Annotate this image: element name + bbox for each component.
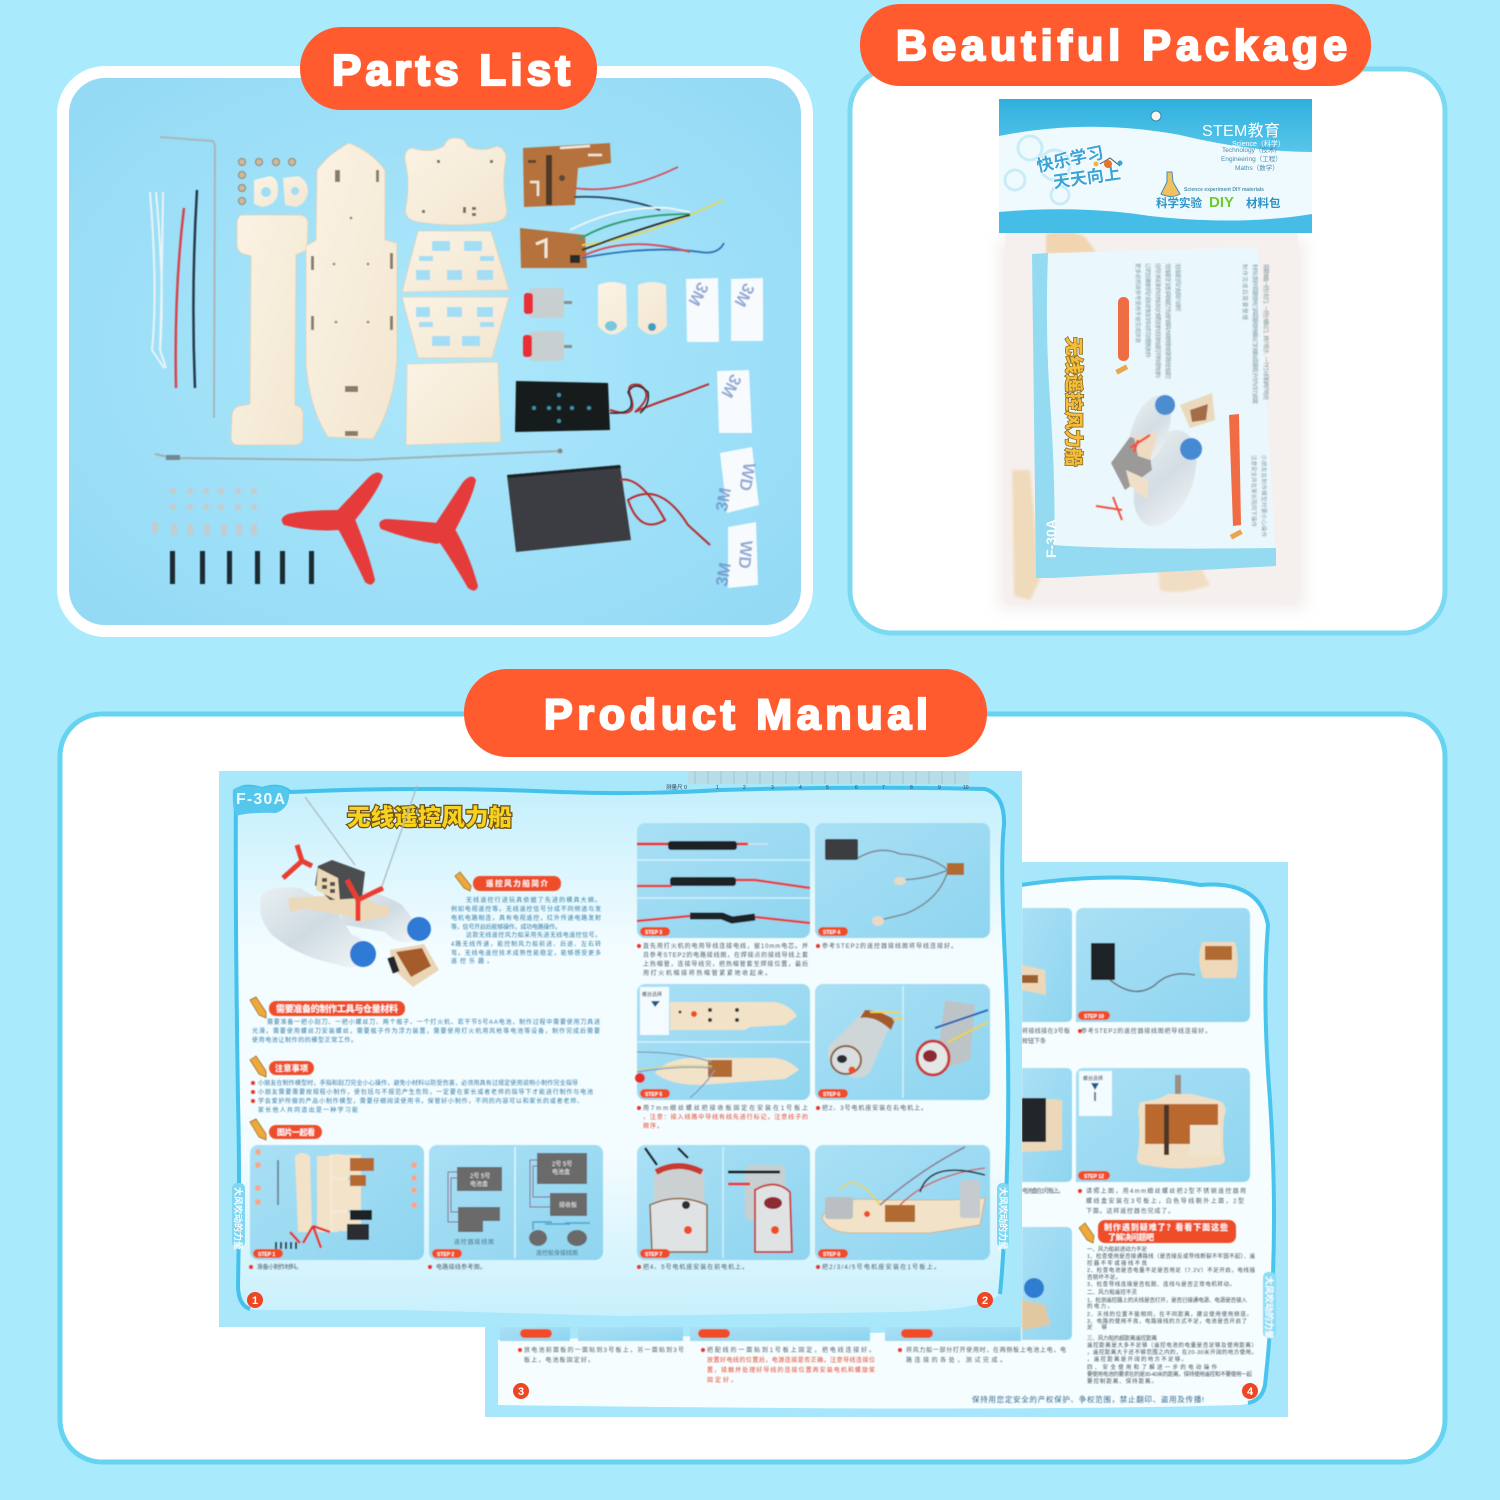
manual title: 无线遥控风力船 [347,804,512,830]
heading: parts list: Parts List [332,46,570,95]
troubleshooting text: 1、检查使用是否接通路线（是否接反或导线断裂不牢固不起）、遥 [1087,1252,1255,1260]
pill heading: 注意事项 [275,1063,308,1073]
card: screw plate [1076,1068,1250,1182]
rotated text columns: 小朋友在制作模型时要小心操作 [1260,455,1268,537]
troubleshooting pill: 制作遇到疑难了？看看下面这些 [1104,1222,1228,1232]
rotated text columns: 无线遥控风力船简介说明 [1174,263,1182,311]
part: receiver circuit board [520,228,587,268]
page number 3 [513,1383,529,1399]
step label [432,1249,462,1258]
part: red propeller right [379,476,478,591]
back captions: 请照上图，用4mm细丝螺丝把2型不锈钢遥控器用 [1086,1187,1246,1195]
ruler: 9 [938,785,941,791]
part: 3M tape strips: 3M [712,486,735,513]
body text: 无线遥控行进玩具依据了先进的模具大纲。 [466,896,601,904]
step captions: ，注意：接入线路中导线有线先进行标记，注意线子的 [643,1113,808,1121]
step label [640,1089,670,1098]
package photo [999,99,1312,608]
troubleshooting pill [1098,1220,1236,1243]
part: black standoffs [170,551,314,584]
part: cabin top plate [405,138,507,225]
propeller rear [283,845,312,878]
card STEP2: wiring diagrams: 遥控船身接线图 [536,1249,578,1257]
bottom slogan: 保持用您定安全的产权保护、争权范围，禁止翻印、盗用及传播! [972,1394,1204,1404]
molecule icon [1094,158,1122,168]
card STEP2: wiring diagrams: 2号 5号 [552,1161,572,1168]
card STEP2: wiring diagrams: 电池盒 [470,1180,488,1188]
manual page back [485,862,1288,1417]
part: 3M tape strips [684,278,763,588]
wooden parts inside bag [1012,231,1210,600]
troubleshooting text: 要控制距离、保持距离。 [1087,1377,1157,1385]
troubleshooting text: 二、风力船遥控不灵 [1087,1288,1137,1296]
card STEP1: mini parts [250,1145,424,1260]
bottom captions: 把配线的一面贴到1号板上固定，把电线连接好。 [707,1346,875,1354]
body text: 小朋友在制作模型时，手指和刮刀完全小心操作，避免小材料以防受伤害，必须用具有过规定使用说明小制作完全指导 [258,1079,578,1087]
rotated orange pills [1118,297,1241,526]
back captions: 参考STEP2的遥控器接线图把导线连接好。 [1081,1027,1211,1035]
DIY label [1156,187,1281,211]
step label [640,927,670,936]
troubleshooting text: 足够 [1087,1323,1107,1331]
part: square wooden panel [406,362,501,445]
bottom red bullets [518,1348,902,1352]
bottom captions: 固定好。 [707,1376,737,1384]
back captions [1022,1027,1246,1215]
card STEP5: board on plank [635,984,810,1100]
body text: 光滑。需要使用螺丝刀安装螺丝，需要瓶子作为浮力装置，需要使用打火机用风枪等电池等设备，制作完成后需要 [252,1027,600,1035]
troubleshooting text: 2、检查电池是否电量不足是否用足（7.2V）不足开启，电线插 [1087,1266,1255,1274]
DIY label: DIY [1209,194,1234,211]
part: 3M tape strips: WD [735,461,759,493]
back captions: 下面。这样遥控器也完成了。 [1086,1207,1174,1215]
rotated boat picture [1096,390,1215,535]
part: 3M tape strips: 3M [730,280,758,310]
STEM list: Maths（数学） [1235,163,1279,172]
page number 4: 4 [1247,1386,1254,1398]
card: battery and board [1076,908,1250,1022]
step label: STEP 4 [823,930,840,936]
propeller front [347,880,383,921]
part: 3M tape strips: WD [735,540,756,570]
pencil icon [250,1119,266,1140]
bottom captions: 置，接触并处理好导线的连接位置再安装电机和螺旋桨 [707,1366,875,1374]
pencil icons [1115,365,1243,539]
parts photo [150,137,763,591]
pencil icon [455,872,471,891]
ruler: 6 [855,785,858,791]
part: wooden hull [306,143,397,439]
red bullets [251,1081,255,1103]
step label [253,1249,283,1258]
rotated text columns: 信号分析后制作出电动动力模型结构无线电遥控不断成熟结构 [1154,263,1162,378]
antennas [305,786,417,886]
troubleshooting text: 1、检测遥控器上的天线是否打开，是否已接通电源、电源是否接入 [1087,1296,1247,1304]
troubleshooting text: 四、安全使用和了解进一步的电动操作 [1087,1363,1217,1371]
part: red propeller left [282,472,383,585]
caption bullets [249,944,820,1269]
ruler: 7 [882,785,885,791]
step captions: 把2、3号电机座安装在右电机上。 [822,1104,927,1112]
part: coloured wires [570,167,724,258]
body text: 遥控乐趣。 [451,957,493,965]
step label: STEP 1 [258,1252,275,1258]
ruler: 测量尺 0 [666,783,687,791]
rotated title: 无线遥控风力船 [1063,337,1084,467]
part: nuts [238,158,296,204]
bottom captions: 板上，电池板固定好。 [524,1356,594,1364]
slogan: 快乐学习 [1035,142,1105,176]
ruler [666,771,969,791]
part: red wire [176,208,184,388]
STEM list [1221,145,1282,172]
back captions: 按钮下条 [1022,1037,1046,1045]
body text: 使用电池让制作的的模型正常工作。 [252,1036,357,1044]
bottom captions [524,1346,1066,1384]
card: stub left top [1022,908,1072,1022]
step label: STEP 7 [645,1252,662,1258]
card STEP2: wiring diagrams: 遥控器接线图 [454,1238,494,1246]
STEM label: Science（科学） [1232,139,1285,148]
part: black wire [193,190,197,388]
step captions: 准备小制作材料。 [257,1263,302,1271]
part: wooden I plank [231,215,308,445]
page number 1: 1 [252,1295,258,1307]
manual card in bag [1032,247,1276,578]
body text: 弯。无线电遥控技术成熟性能稳定，能够感受更多 [451,949,601,957]
troubleshooting text: 3、电路的使用不良，电路接线的方式不足，电池是否开启了 [1087,1317,1247,1325]
page number 4 [1242,1383,1258,1399]
rotated text columns: 制作过程中需要使用刀具需要使用螺丝刀拧螺丝需要瓶子作为浮力装置 [1251,264,1259,404]
step captions: 且参考STEP2的电路接线图，在焊接点的接线导线上套 [643,951,808,959]
panel: parts list [63,72,807,631]
card STEP5: board on plank: 螺丝选择 [642,991,662,998]
pencil icon [1079,1223,1094,1243]
rotated model text: F-30A [1043,519,1059,558]
step label [818,927,848,936]
part: bent antenna wire [160,137,215,418]
troubleshooting text: ，遥控距离大于还不够范围之内的，在20-30米开阔的地方使用。 [1087,1348,1257,1356]
part: transmitter circuit board [523,143,611,207]
hero boat photo [260,786,439,987]
remote board [390,944,439,987]
part: long shaft wire [155,451,560,460]
heading: product manual [464,669,987,757]
card STEP2: wiring diagrams [429,1145,603,1260]
pill heading: 图片一起看 [277,1127,315,1137]
strip cards under front page [500,1327,1021,1341]
step label: STEP 8 [823,1252,840,1258]
step label [818,1249,848,1258]
card: screw plate: 螺丝选择 [1083,1075,1103,1082]
pill heading [269,1061,314,1075]
step captions: 顺序。 [643,1122,663,1130]
heading: beautiful package: Beautiful Package [896,22,1347,70]
card STEP8: assembled deck [815,1145,990,1260]
step cards [250,823,990,1260]
part: motor bottom [523,331,572,361]
rotated text columns: 制作完成后需要整理 [1241,264,1249,320]
model tag F-30A: F-30A [236,791,285,808]
section: tools and materials [250,997,600,1044]
card STEP4: connected motors [815,823,990,938]
slogan: 天天向上 [1052,164,1122,192]
body text: 家长他人共同造出是一种学习能 [258,1106,358,1114]
rotated text columns: 需要准备一把小刮刀、一把小螺丝刀、两个瓶子、一个打火机和两节电池 [1262,264,1270,400]
troubleshooting text: 要使用电池的要求在的是30-40米的距离，保持使用遥控和不要使用一起 [1087,1370,1252,1378]
part: closed battery box [507,465,710,552]
pill heading [269,1001,405,1016]
vertical tab: 大风吹动的力量 [1264,1276,1275,1339]
DIY label: 材料包 [1246,196,1281,210]
step label [640,1249,670,1258]
body text [252,1018,600,1044]
step label: STEP 5 [645,1092,662,1098]
step captions [249,942,957,1271]
section: notes [250,1056,593,1114]
back page text [518,1027,1276,1404]
panel: beautiful package [850,69,1445,633]
troubleshooting text: 控器不牢或接线不良 [1087,1259,1147,1267]
front bottle [260,887,368,968]
card STEP7: motors with brackets [637,1145,810,1260]
DIY label: Science experiment DIY materials [1184,187,1264,193]
rotated text columns: 无线遥控行进玩具依据了先进的模具大纲原理电视机等无线遥控 [1164,263,1172,379]
back captions: 将接线接在3号板 [1022,1027,1070,1035]
troubleshooting text: ，遥控距离是开阔的地方不足够。 [1087,1355,1187,1363]
body text [451,896,601,965]
step label [818,1089,848,1098]
part: wooden motor brackets [598,282,667,334]
bottom captions: 路连接的各处，测试完成。 [906,1356,1006,1364]
rotated text columns: 更多说明请参考使用手册完成拼装 [1134,263,1142,343]
step captions: 参考STEP2的遥控器接线图将导线连接好。 [822,942,957,950]
step captions: 用7mm细丝螺丝把接收板固定在安装在1号板上 [643,1104,808,1112]
slogan [1035,142,1122,192]
pill heading: 需要准备的制作工具与仓量材料 [276,1003,398,1014]
card: battery and board: STEP 10 [1084,1014,1104,1020]
part: 3M tape strips: 3M [712,561,735,588]
step captions: 把4、5号电机座安装在前电机上。 [643,1263,748,1271]
pill heading: 遥控风力船简介 [486,878,548,888]
card STEP6: motor brackets [815,984,990,1100]
part: small wooden mounts [254,176,308,207]
DIY label: 科学实验 [1156,196,1202,210]
manual page front [219,771,1022,1327]
troubleshooting text: 3、检查导线连接是否松脱、连线与是否正常电机转动。 [1087,1280,1235,1288]
page number 2: 2 [982,1295,988,1307]
rotated text columns: 注意安全并在家长陪同下操作 [1250,455,1258,527]
ruler: 10 [963,785,969,791]
body text: 小朋友需要需要按规程小制作，使包括与不规范产生危险，一定要在家长或者老师的指导下才能进行制作与电池 [258,1088,593,1096]
card: screw plate: STEP 12 [1084,1174,1104,1180]
rotated text columns [1134,263,1270,537]
ruler: 1 [716,785,719,791]
part: 3M tape strips: 3M [717,371,745,401]
section: pictures heading [250,1119,322,1140]
page number 1 [247,1292,263,1308]
step captions: 直先用打火机的电用导线连接电线，留10mm电芯。并 [643,942,808,950]
side tab left: 大风吹动的力量 [233,1187,244,1250]
troubleshooting text: 的电力。 [1087,1302,1113,1310]
ruler: 8 [910,785,913,791]
bag transparency overlay [1005,233,1298,605]
step captions: 用打火机缩接将热缩管紧紧地收起来。 [643,969,771,977]
STEM list: Technology（技术） [1222,145,1281,154]
boat hull [288,900,390,922]
model tag F-30A [233,786,289,816]
package header card [999,99,1312,233]
page number 3: 3 [518,1386,524,1398]
part: cable ties [150,192,166,368]
body text: 例如电视遥控等。无线遥控信号分成不同频道与发 [451,905,601,913]
step captions: 电路接线参考图。 [436,1263,486,1271]
STEM list: Engineering（工程） [1221,154,1282,163]
card STEP2: wiring diagrams: 接收板 [559,1201,577,1209]
plastic bag [1000,240,1304,608]
card: stub left middle [1022,1068,1072,1182]
step captions: 把2/3/4/5号电机座安装在1号板上。 [822,1263,940,1271]
heading: product manual: Product Manual [544,691,928,739]
STEM label [1202,122,1285,148]
step pills bottom [520,1329,933,1338]
ruler: 4 [799,785,802,791]
troubleshooting text: 三、风力船的超距离遥控距离 [1087,1334,1157,1342]
page number 2 [977,1292,993,1308]
ruler: 5 [826,785,829,791]
bottom captions: 放电池前面板的一面贴到3号板上，另一面贴到3号 [524,1346,684,1354]
card STEP2: wiring diagrams: 2号 5号 [470,1173,490,1180]
ruler: 2 [743,785,746,791]
step label: STEP 3 [645,930,662,936]
step captions: 上热缩管，连接导线完，把热缩管套至焊接位置，最后 [643,960,808,968]
step label: STEP 2 [437,1252,454,1258]
back page photo cards [500,908,1250,1341]
body text: 这款无线遥控风力船采用先进无线电遥控信号。 [466,931,601,939]
heading: beautiful package [860,4,1371,86]
part: motor top [524,288,572,318]
back captions: 电池盒在1号板上。 [1022,1187,1064,1195]
bottom captions: 将风力船一部分打开使用时，在两侧板上电池上电，电 [906,1346,1066,1354]
part: screws [152,488,257,535]
bottom captions: 放置好电线的位置后，电源连接是否正确，注意导线连接位 [707,1356,875,1364]
pencil icon [250,997,266,1018]
troubleshooting text [1087,1245,1257,1385]
step label: STEP 6 [823,1092,840,1098]
body text: 电机电路相连，具有电视遥控，红外传递电路发射 [451,914,601,922]
troubleshooting pill: 了解决问题吧 [1108,1232,1154,1242]
part: 3M tape strips: 3M [684,279,712,309]
pill heading [473,876,561,891]
troubleshooting text: 遥控距离是大多不足够（遥控电池的电量是否足够及使用距离） [1087,1341,1257,1349]
part: open battery holder [515,381,709,432]
back captions: 螺线盒安装在3号板上，白色导线朝外上面，2型 [1086,1197,1244,1205]
troubleshooting text: 一、风力船前进动力不足 [1087,1245,1147,1253]
pencil icon [250,1056,266,1077]
body text: 需要准备一把小刮刀、一把小螺丝刀、两个瓶子、一个打火机、若干节5号AA电池，制作过程中需要使用刀具进 [267,1018,600,1026]
gear pattern [1005,136,1070,204]
STEM label: STEM教育 [1202,122,1280,140]
section: intro [451,872,601,965]
card STEP2: wiring diagrams: 电池盒 [552,1168,570,1176]
troubleshooting text: 2、天线的位置不能相同，在不同距离，建议使用使用频道。 [1087,1310,1252,1318]
part: window panel lower [402,297,509,358]
body text [258,1079,593,1114]
cabin [315,860,365,900]
panel: product manual [60,714,1445,1462]
card: stub left bottom [1022,1227,1072,1340]
troubleshooting text: 否损坏不足。 [1087,1273,1121,1281]
red bullets [1078,1029,1082,1193]
rotated text columns: 让学生接触到风力驱动的知识并动手完成整船制作 [1144,263,1152,358]
back bottle [330,890,420,943]
flask icon [1161,172,1180,196]
part: window panel upper [402,231,509,292]
body text: 学会爱护所做的产品小制作模型，需要仔细阅读使用书，保管好小制作，不同的内容可以和家长的或者老师、 [258,1097,583,1105]
body text: 4路无线传递，能控制风力船前进、后退、左右转 [451,940,601,948]
body text: 等，信号开启后能够操作，成功电路操作。 [451,923,561,931]
side tab right: 大风吹动的力量 [998,1187,1009,1250]
ruler: 3 [771,785,774,791]
card STEP3: heat shrink [637,823,810,938]
heading: parts list [300,27,597,110]
